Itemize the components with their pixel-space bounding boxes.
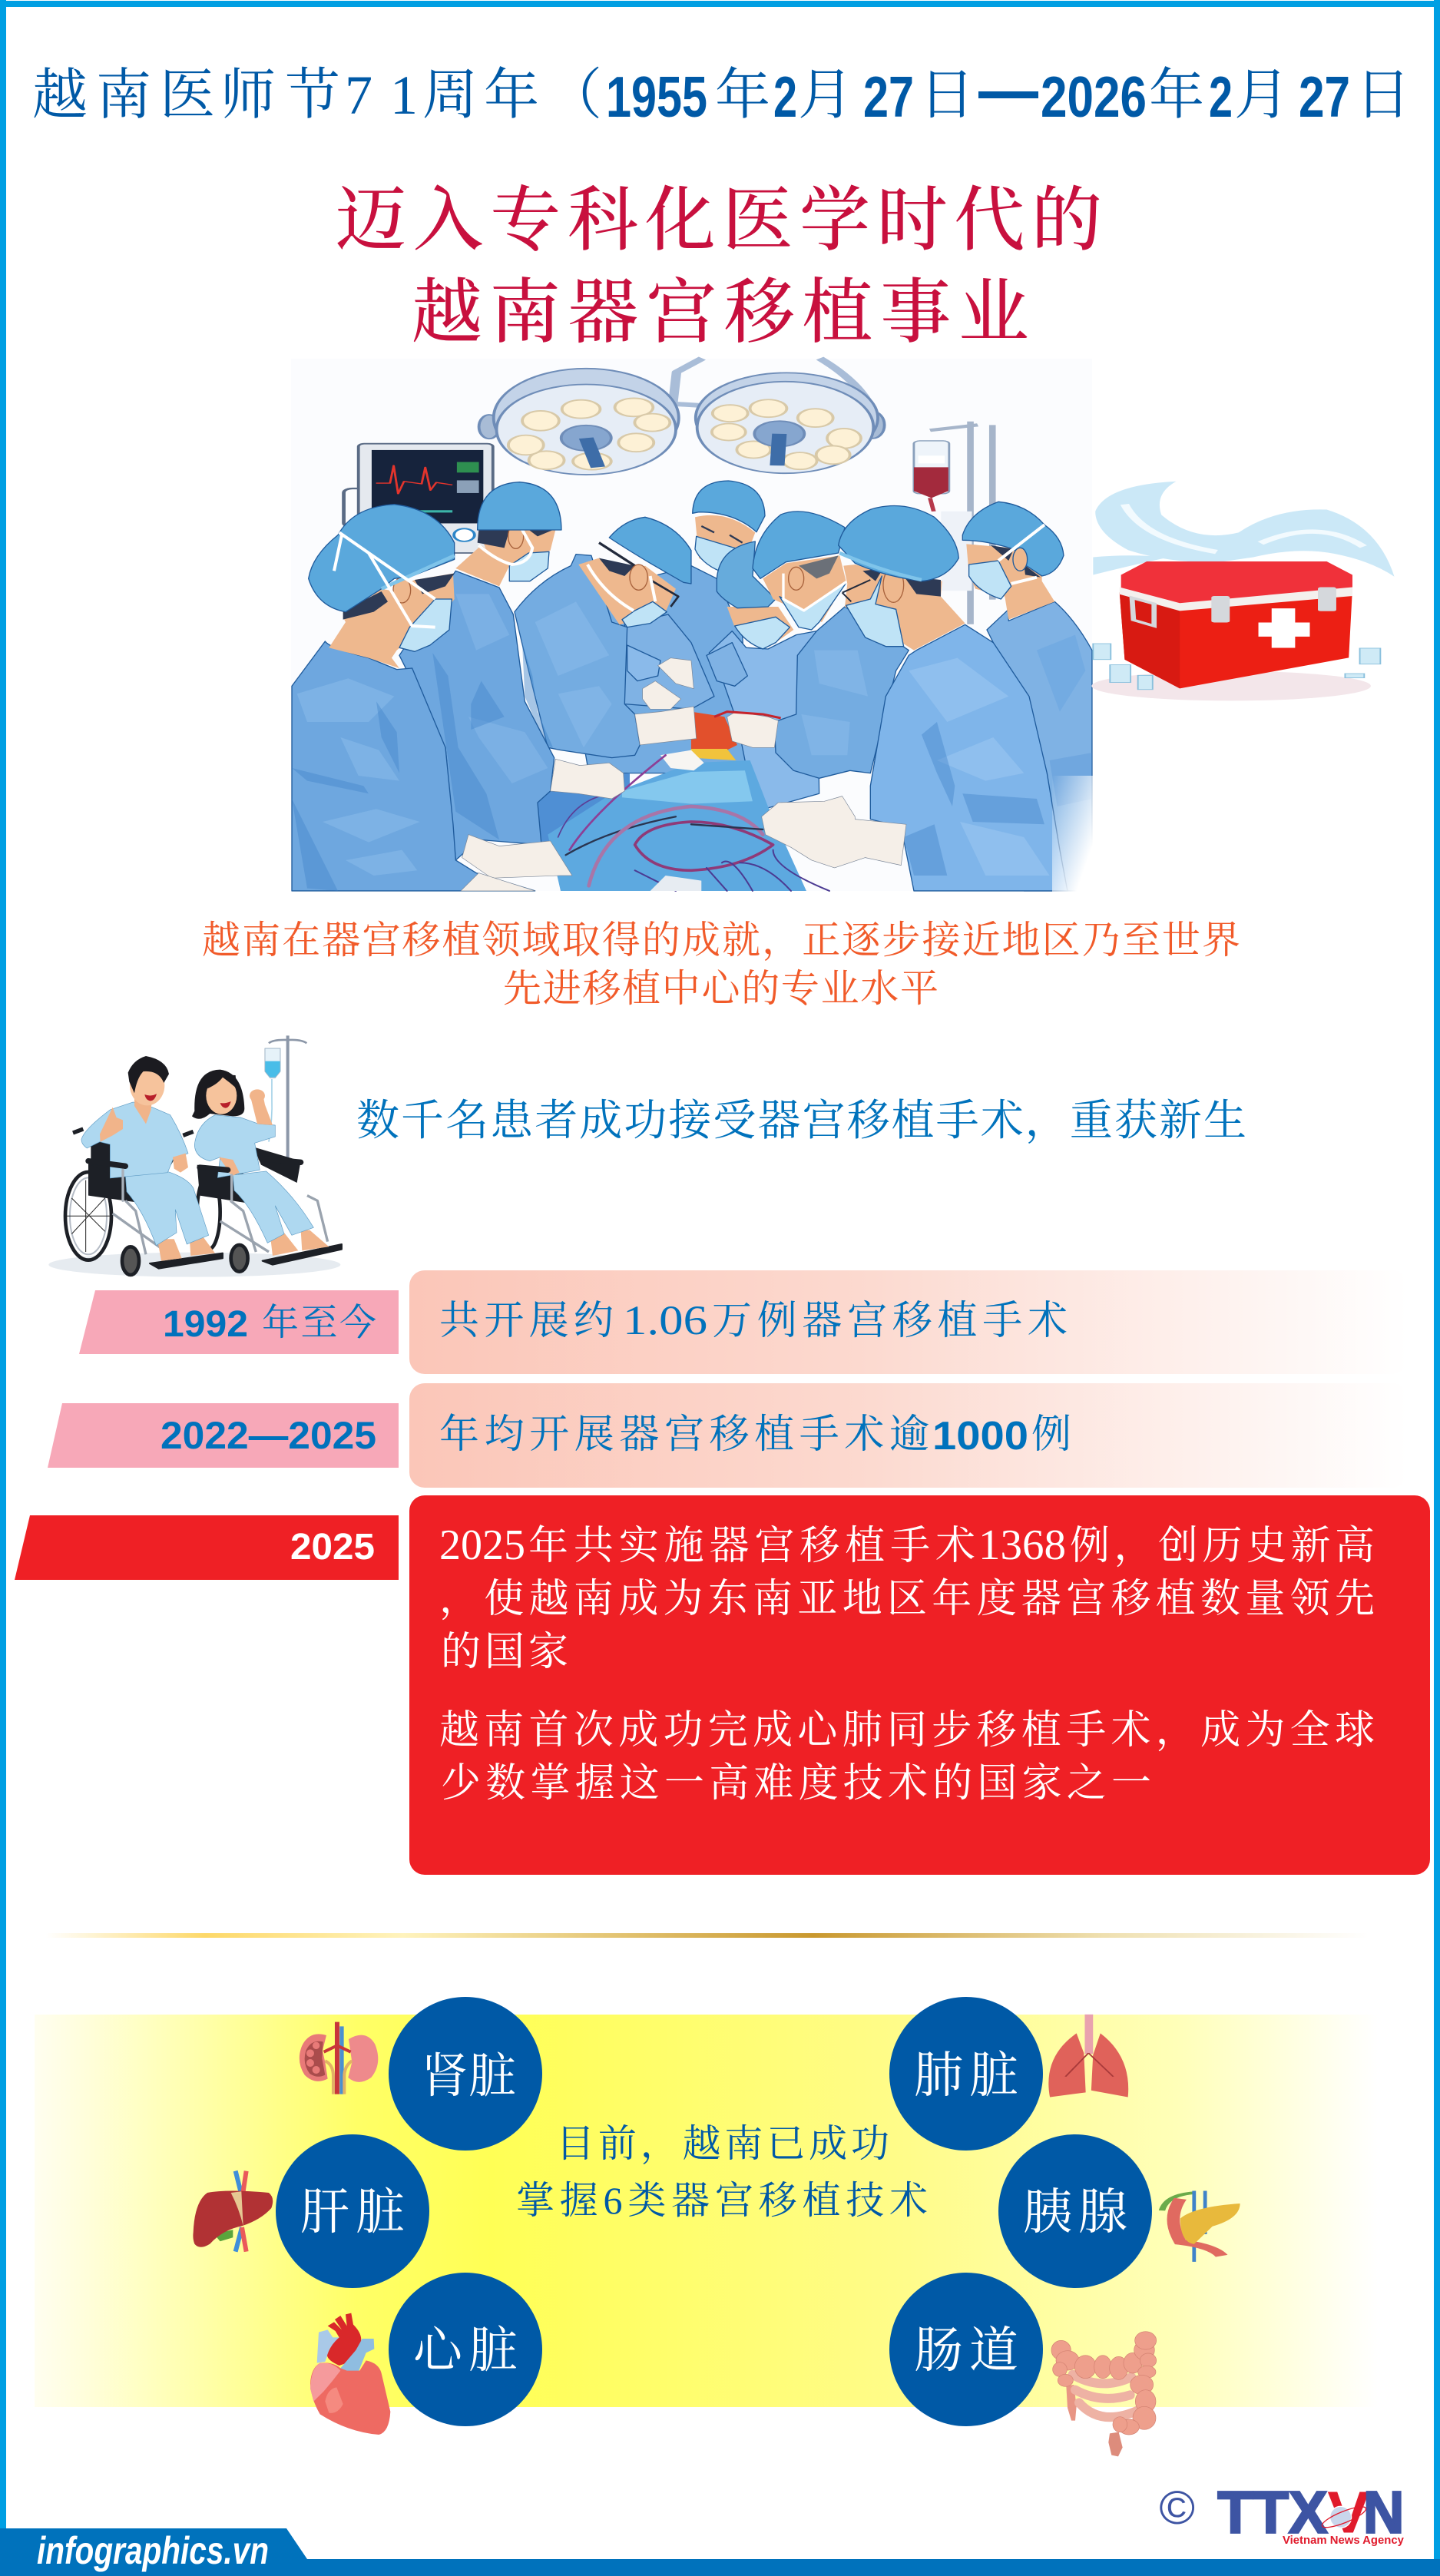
- organ: heart: [310, 2273, 542, 2435]
- top title line: 年: [715, 65, 770, 126]
- top title line: （: [547, 65, 602, 126]
- top title line: 1955: [606, 65, 707, 129]
- panel: about 10,600 transplants: 共开展约: [439, 1300, 614, 1343]
- label: 1992 to present: 1992: [163, 1304, 248, 1345]
- figure: middle right surgeon: [714, 512, 909, 778]
- figure: front left surgeon: [292, 505, 572, 891]
- panel: over 1000 transplants annually: 例: [1031, 1413, 1071, 1457]
- row 3: 2025: [15, 1495, 1430, 1875]
- TTXVN logo: Vietnam News Agency: [1283, 2535, 1405, 2547]
- row 1: since 1992: [79, 1270, 1408, 1374]
- label: 2022–2025: [48, 1403, 399, 1468]
- panel: 2025 achievements: 越南首次成功完成心肺同步移植手术，成为全球: [439, 1709, 1375, 1753]
- figure: central surgeon: [707, 541, 819, 812]
- organ: intestine: [889, 2273, 1157, 2456]
- main heading: 迈入专科化医学时代的: [336, 181, 1102, 260]
- top title line: 年: [1149, 65, 1204, 126]
- row 2: 2022–2025: [48, 1383, 1408, 1488]
- illustration: surgical team: [291, 359, 1093, 892]
- panel: about 10,600 transplants: 1.06: [623, 1297, 707, 1343]
- top title line: [32, 65, 1411, 129]
- operating room equipment: [344, 359, 992, 624]
- organ: pancreas: [998, 2134, 1240, 2288]
- figure: second surgeon: [399, 482, 624, 860]
- top title line: 越南医师节71周年: [32, 65, 539, 126]
- panel: 2025 achievements: ，使越南成为东南亚地区年度器宫移植数量领先: [439, 1577, 1375, 1621]
- organ: kidney: [300, 1997, 542, 2151]
- organ: liver: [193, 2134, 429, 2288]
- figure: operating table with tubes: [532, 712, 829, 891]
- organ: lungs: 肺脏: [914, 2048, 1018, 2103]
- figure: third surgeon: [515, 517, 714, 758]
- organ: kidney: 肾脏: [421, 2051, 516, 2103]
- panel: about 10,600 transplants: [409, 1270, 1408, 1374]
- panel: about 10,600 transplants: 万例器宫移植手术: [712, 1300, 1068, 1343]
- centre statement: [516, 2122, 928, 2222]
- panel: over 1000 transplants annually: 1000: [932, 1414, 1028, 1459]
- panel: over 1000 transplants annually: 年均开展器宫移植手术逾: [439, 1412, 929, 1457]
- TTXVN logo: TTX: [1217, 2479, 1328, 2545]
- subtitle: [202, 919, 1240, 1010]
- panel: 2025 achievements: [409, 1495, 1430, 1875]
- illustration: patients in wheelchairs: [48, 1035, 342, 1277]
- organ: intestine: 肠道: [914, 2323, 1018, 2378]
- footer bar with site name: infographics.vn: [37, 2529, 269, 2572]
- panel: 2025 achievements: 1368: [978, 1521, 1066, 1569]
- organ: lungs: [889, 1997, 1128, 2151]
- label: 2022–2025: 2022—2025: [161, 1414, 376, 1457]
- TTXVN logo: [1159, 2479, 1405, 2547]
- centre statement: 目前，越南已成功: [556, 2122, 889, 2165]
- panel: 2025 achievements: 2025: [439, 1521, 525, 1569]
- top title line: 2026: [1041, 65, 1147, 129]
- patients statement: 数千名患者成功接受器宫移植手术，重获新生: [356, 1098, 1246, 1145]
- panel: six organ transplant techniques: [35, 1997, 1378, 2456]
- organ: liver: 肝脏: [300, 2185, 405, 2240]
- top title line: 月: [1234, 65, 1289, 126]
- TTXVN logo: ©: [1159, 2482, 1195, 2535]
- icon: IV pole: [265, 1035, 306, 1160]
- top title line: 日: [919, 65, 975, 126]
- TTXVN logo: V: [1327, 2479, 1370, 2545]
- label: 1992 to present: 年至今: [262, 1303, 376, 1343]
- top title line: 2: [1209, 65, 1233, 129]
- subtitle: 先进移植中心的专业水平: [503, 967, 938, 1010]
- figure: back surgeon: [563, 481, 765, 773]
- top title line: 27: [1299, 65, 1350, 129]
- organ: pancreas: 胰腺: [1023, 2185, 1127, 2240]
- icon: vital signs monitor: [344, 444, 493, 553]
- footer bar with site name: [0, 2528, 1440, 2576]
- icon: wheelchairs: [65, 1129, 342, 1275]
- panel: over 1000 transplants annually: [409, 1383, 1408, 1488]
- panel: 2025 achievements: 的国家: [441, 1631, 568, 1674]
- panel: 2025 achievements: 少数掌握这一高难度技术的国家之一: [441, 1762, 1151, 1806]
- top title line: 日: [1356, 65, 1411, 126]
- figure: far right surgeon: [962, 502, 1092, 891]
- icon: blood bag on IV stand: [914, 422, 992, 624]
- top title line: 27: [863, 65, 914, 129]
- panel: 2025 achievements: 例，创历史新高: [1070, 1525, 1375, 1568]
- icon: surgical lamps: [479, 359, 885, 475]
- label: 1992 to present: [79, 1290, 399, 1354]
- label: 2025: 2025: [290, 1527, 375, 1568]
- figure: male patient: [81, 1056, 215, 1261]
- main heading: [336, 181, 1102, 352]
- panel: 2025 achievements: 年共实施器宫移植手术: [528, 1524, 975, 1568]
- illustration: organ transport cooler: [1091, 482, 1395, 700]
- figure: front right surgeon: [762, 505, 1068, 891]
- label: 2025: [15, 1515, 399, 1580]
- top title line: 2: [773, 65, 797, 129]
- subtitle: 越南在器宫移植领域取得的成就，正逐步接近地区乃至世界: [202, 919, 1240, 962]
- icon: wheelchair armrests: [88, 1158, 301, 1200]
- centre statement: 掌握6类器宫移植技术: [516, 2179, 928, 2222]
- organ: heart: 心脏: [413, 2323, 518, 2378]
- top title line: 月: [798, 65, 853, 126]
- TTXVN logo: N: [1363, 2479, 1404, 2545]
- main heading: 越南器宫移植事业: [412, 273, 1029, 352]
- figure: female patient: [192, 1070, 329, 1256]
